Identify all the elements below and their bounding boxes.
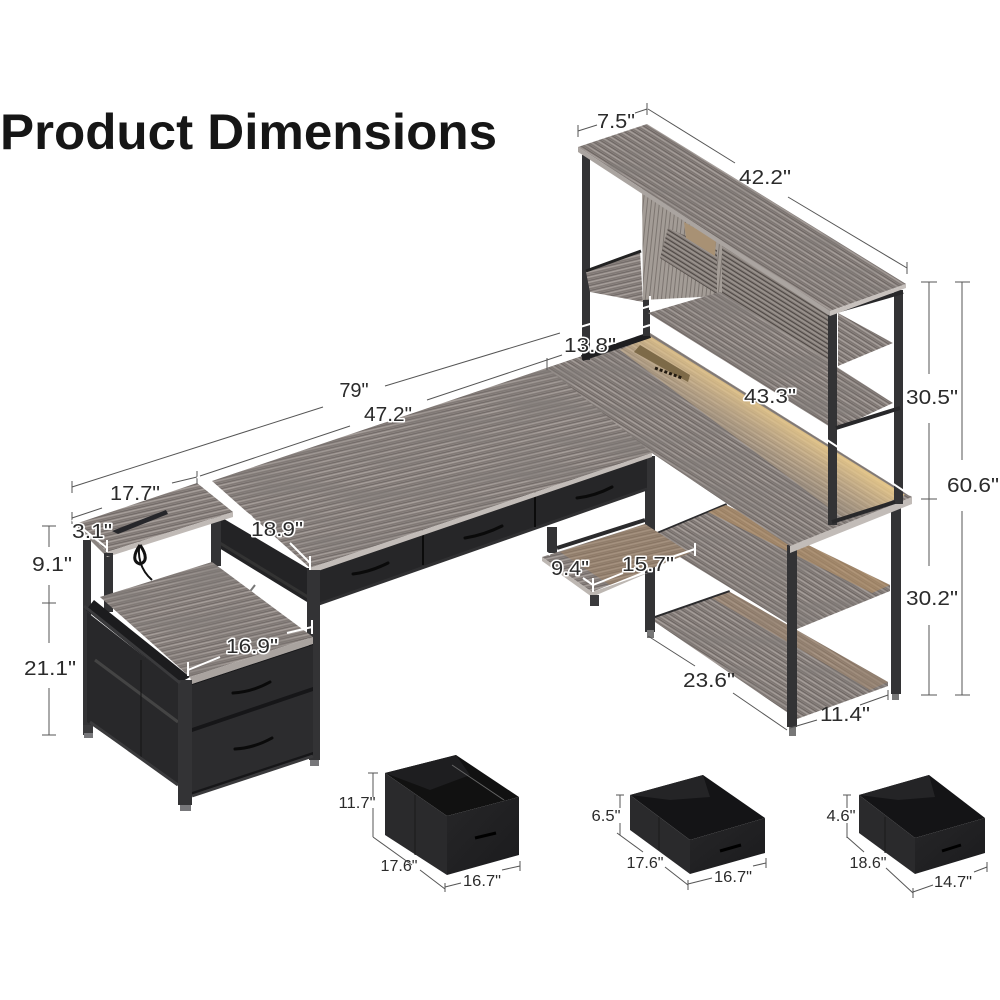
dimension labels: 16.7" [714,869,752,886]
desk power strip [634,345,690,382]
monitor riser top [78,483,233,564]
dimension labels: 17.7" [110,483,160,505]
cabinet drawers [192,644,313,796]
cabinet frame [83,680,192,805]
dimension labels: 11.4" [820,704,870,726]
cabinet dark rim [86,600,190,684]
dimension labels: 43.3" [744,386,796,408]
side of desk drawers [219,516,307,602]
dimension labels: 16.9" [226,636,278,658]
desk drawers and frame [211,458,647,638]
cabinet top [100,562,313,677]
dimension labels [24,111,999,891]
hutch [578,124,906,525]
cabinet side [87,612,178,785]
dimension labels: 18.6" [850,855,886,872]
drawer handles [353,487,612,574]
keyboard tray [542,520,690,606]
dimension labels: 21.1" [24,658,76,680]
dimension lines white [72,296,910,676]
dimension labels: 14.7" [934,874,972,891]
dimension labels: 60.6" [947,475,999,497]
dimension labels: 30.5" [906,387,958,409]
shelving unit legs [645,456,901,736]
cabinet rear legs [83,515,320,760]
dimension labels: 15.7" [622,554,674,576]
dimension labels: 3.1" [72,521,112,543]
riser outlet strip [112,510,168,534]
front drawers [319,458,647,603]
rear bars of lower shelves [655,505,730,618]
dimension labels: 6.5" [592,808,620,825]
hutch back wall [642,188,830,372]
hutch upper right shelf [838,313,893,366]
dimension labels: 17.6" [380,858,418,875]
dimension labels: 7.5" [597,111,635,133]
hutch front frame [828,290,903,525]
file cabinet [83,515,320,811]
dimension labels: 9.4" [551,558,589,580]
dimension labels: 30.2" [906,588,958,610]
hutch rear rail [582,335,650,358]
dimension labels: 11.7" [338,795,376,812]
cabinet feet [84,733,319,811]
drawer bin large [385,755,519,875]
dimension labels: 4.6" [826,808,856,825]
cabinet handles [233,682,272,749]
dimension labels: 18.9" [251,519,303,541]
dimension labels: 23.6" [683,670,735,692]
lower shelf upper [652,505,890,629]
dimension labels: 9.1" [32,554,72,576]
lower shelf bottom [655,592,888,719]
hutch lower shelf [648,292,893,430]
dimension labels: 17.6" [626,855,664,872]
drawer bin medium [630,775,765,874]
dimension labels: 79" [339,380,369,402]
drawer bin small [859,775,985,874]
right shelving unit under desk [645,456,901,736]
desk legs [211,516,319,638]
hutch left shelf [586,251,643,302]
hutch left leg [582,155,590,360]
dimension labels: 16.7" [463,873,501,890]
dimension labels: 13.8" [564,335,616,357]
desk edges [310,453,652,573]
title: Product Dimensions [0,104,497,160]
cabinet cable [139,540,152,580]
hutch top shelf [578,124,906,311]
dimension lines dark [42,103,987,898]
riser plug [135,545,145,564]
dimension labels: 47.2" [364,404,412,426]
under-hutch LED glow [620,336,905,520]
L-shaped desktop [212,333,912,573]
dimension labels: 42.2" [739,167,791,189]
